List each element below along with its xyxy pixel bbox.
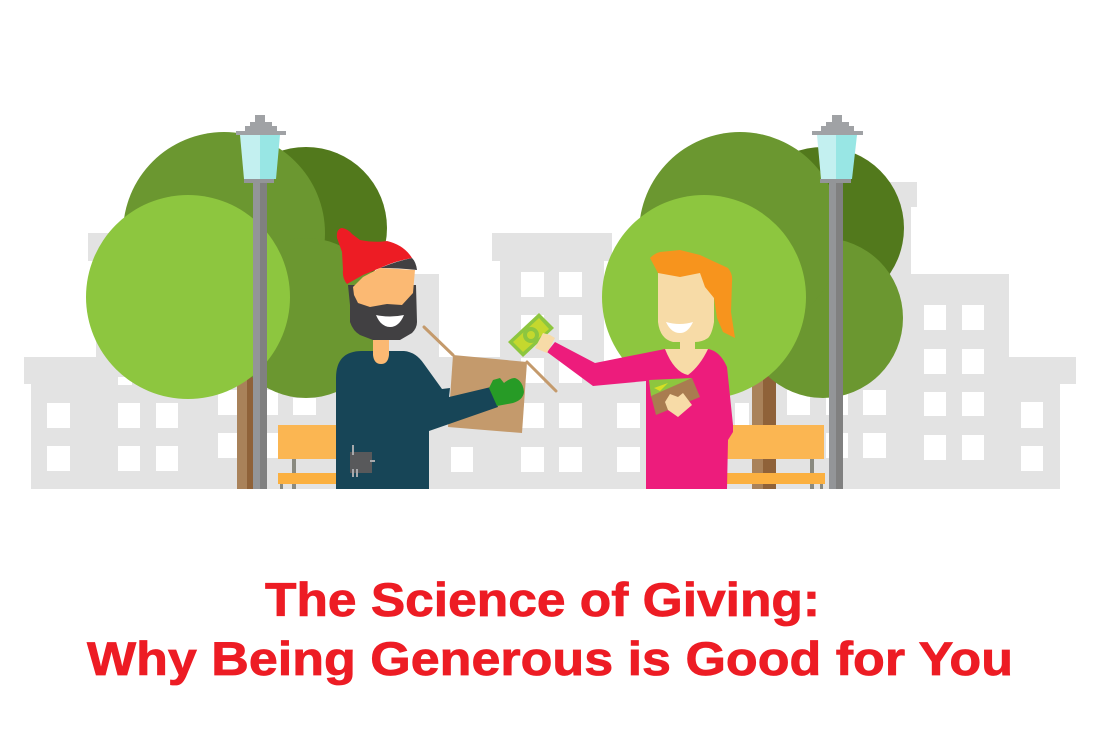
woman giving money — [508, 250, 735, 489]
title — [87, 573, 1013, 685]
man face — [353, 268, 415, 307]
left street lamp — [236, 115, 286, 489]
woman body and arm — [547, 342, 733, 489]
city skyline background — [24, 182, 1076, 489]
man hair band — [380, 258, 417, 270]
title: The Science of Giving: — [265, 573, 820, 626]
wallet with cash — [649, 378, 700, 417]
banknote — [508, 313, 555, 357]
man neck — [373, 338, 389, 364]
woman smile — [666, 322, 693, 333]
right tree — [602, 132, 904, 489]
woman face — [658, 270, 714, 342]
title: Why Being Generous is Good for You — [87, 632, 1013, 685]
man with hat and beard — [336, 228, 524, 489]
man mitten — [489, 378, 524, 406]
woman orange hair — [650, 250, 735, 338]
left bench — [278, 425, 338, 489]
man beard — [348, 285, 417, 340]
left tree — [86, 132, 387, 489]
woman hand on wallet — [665, 393, 692, 417]
cardboard box — [424, 327, 556, 433]
right street lamp — [812, 115, 863, 489]
coat patch — [350, 445, 375, 477]
man body and arm — [336, 351, 498, 489]
woman hand holding note — [535, 333, 555, 353]
man smile — [376, 315, 404, 327]
man red hat — [337, 228, 412, 284]
right bench — [726, 425, 825, 489]
woman neck and neckline — [665, 335, 708, 375]
